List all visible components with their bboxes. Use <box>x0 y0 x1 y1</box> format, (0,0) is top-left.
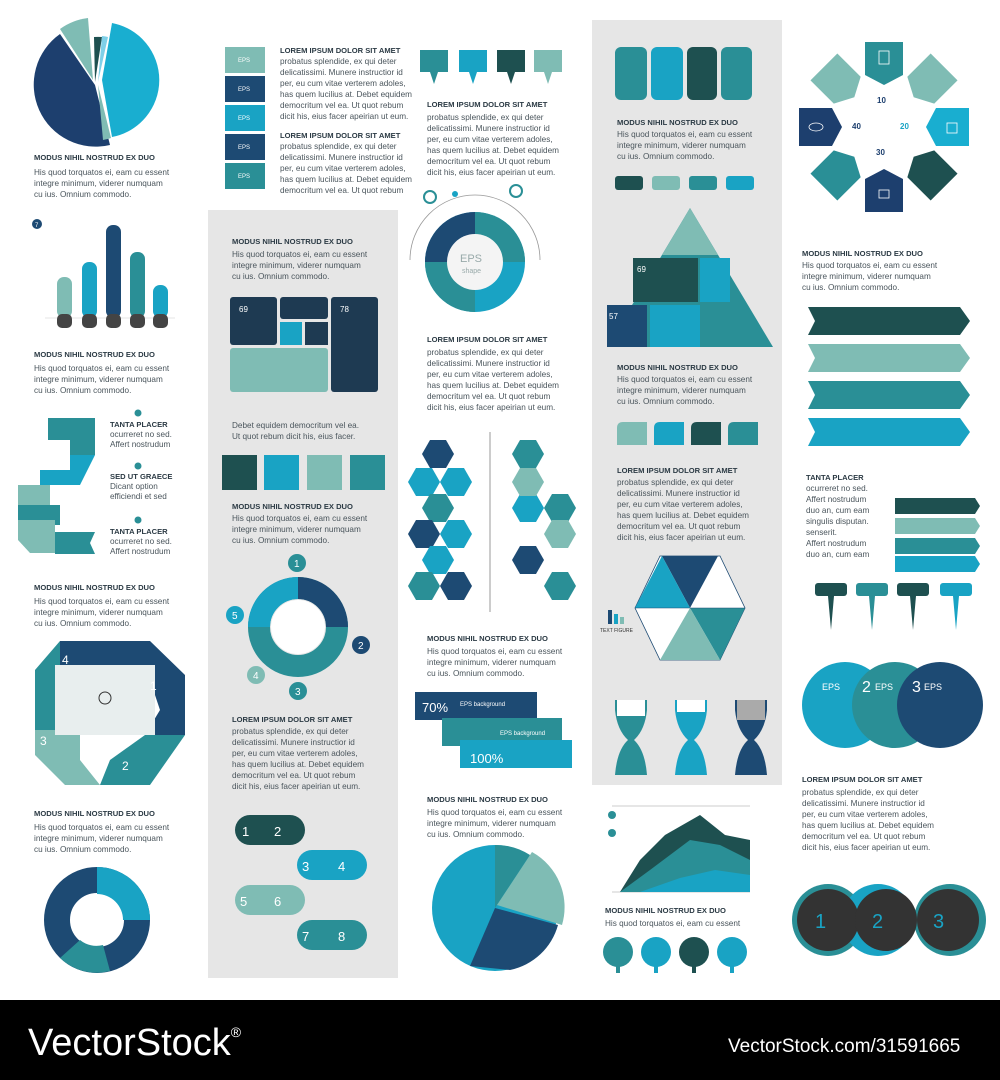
text: col5 lorem: delicatissimi. Munere instructior id <box>802 799 925 808</box>
text: col3 modus 2: integre minimum, viderer numquam <box>427 819 556 828</box>
speech bubbles <box>420 50 562 84</box>
text: col3 lorem 1: LOREM IPSUM DOLOR SIT AMET <box>427 100 548 109</box>
stacked tabs <box>225 47 265 189</box>
ribbon snake: SED UT GRAECE <box>110 472 172 481</box>
banners: 100% <box>470 751 504 766</box>
banners: EPS background <box>500 731 545 737</box>
panel: grey column 4 <box>592 20 782 785</box>
panel: grey column 2 <box>208 210 398 978</box>
stacked tabs: EPS <box>238 145 250 151</box>
hexagon timeline <box>408 432 576 612</box>
text: lorem tabs: has quem lucilius at. Debet equidem <box>280 175 412 184</box>
text: col3 modus 2 <box>427 795 563 839</box>
pyramid: 69 <box>637 265 646 274</box>
text: modus 3: cu ius. Omnium commodo. <box>34 619 131 628</box>
text: panel2 modus 2: integre minimum, viderer numquam <box>232 525 361 534</box>
text: col3 lorem 2: dicit his, eius facer apeirian ut eum. <box>427 403 555 412</box>
text: lorem tabs: has quem lucilius at. Debet equidem <box>280 90 412 99</box>
text: col3 lorem 2: LOREM IPSUM DOLOR SIT AMET <box>427 335 548 344</box>
icon ring col5 <box>799 42 969 212</box>
footer bar: VectorStock.com/31591665 <box>728 1036 960 1057</box>
text: panel2 modus 2 <box>232 502 368 545</box>
area chart <box>608 806 750 892</box>
text: col3 modus 2: cu ius. Omnium commodo. <box>427 830 524 839</box>
text: lorem tabs: dicit his, eius facer apeirian ut eum. <box>280 112 408 121</box>
box grid <box>230 297 378 392</box>
text: tanta placer col5: TANTA PLACER <box>806 473 864 482</box>
text: col3 lorem 1 <box>427 100 559 177</box>
text: modus 4: integre minimum, viderer numquam <box>34 834 163 843</box>
stacked tabs: EPS <box>238 58 250 64</box>
text: debet: Debet equidem democritum vel ea. <box>232 421 359 430</box>
paired pills: 1 <box>242 824 249 839</box>
venn circles: EPS <box>875 682 893 692</box>
text: col5 lorem: dicit his, eius facer apeirian ut eum. <box>802 843 930 852</box>
ring diagram <box>226 554 370 700</box>
three dark circles: 3 <box>933 911 944 933</box>
tabs row <box>617 422 758 445</box>
text: col4 lorem: has quem lucilius at. Debet equidem <box>617 511 749 520</box>
text: tanta placer col5: Affert nostrudum <box>806 539 867 548</box>
text: debet <box>232 421 359 441</box>
text: col3 lorem 2: per, eu cum vitae verterem adoles, <box>427 370 553 379</box>
text: tanta placer col5 <box>806 473 869 559</box>
text: col5 modus: cu ius. Omnium commodo. <box>802 283 899 292</box>
text: col5 modus: MODUS NIHIL NOSTRUD EX DUO <box>802 249 923 258</box>
icon ring col5: 40 <box>852 122 861 131</box>
text: col5 lorem: democritum vel ea. Ut quot rebum <box>802 832 926 841</box>
text: lorem tabs: LOREM IPSUM DOLOR SIT AMET <box>280 46 401 55</box>
arrow banners <box>808 307 970 446</box>
text: col4 modus: His quod torquatos ei, eam cu essent <box>617 130 753 139</box>
ring diagram: 2 <box>358 641 364 652</box>
stacked tabs: EPS <box>238 87 250 93</box>
text: lorem tabs: democritum vel ea. Ut quot rebum <box>280 186 403 195</box>
text: panel2 lorem: delicatissimi. Munere instructior id <box>232 738 355 747</box>
hexagon chart <box>600 556 745 660</box>
cloud trees <box>603 937 747 973</box>
text: modus 3: MODUS NIHIL NOSTRUD EX DUO <box>34 583 155 592</box>
text: modus 4: cu ius. Omnium commodo. <box>34 845 131 854</box>
banners: EPS background <box>460 702 505 708</box>
text: panel2 modus: His quod torquatos ei, eam cu essent <box>232 250 368 259</box>
text: modus 2: integre minimum, viderer numquam <box>34 375 163 384</box>
text: col3 modus 2: His quod torquatos ei, eam cu essent <box>427 808 563 817</box>
footer bar: VectorStock <box>28 1022 231 1064</box>
paired pills: 7 <box>302 929 309 944</box>
text: debet: Ut quot rebum dicit his, eius facer. <box>232 432 355 441</box>
text: col3 modus: integre minimum, viderer numquam <box>427 658 556 667</box>
text: col4 modus 2: MODUS NIHIL NOSTRUD EX DUO <box>617 363 738 372</box>
text: lorem tabs: LOREM IPSUM DOLOR SIT AMET <box>280 131 401 140</box>
ribbon snake: ocurreret no sed. <box>110 430 172 439</box>
text: lorem tabs: per, eu cum vitae verterem adoles, <box>280 79 406 88</box>
text: col5 lorem <box>802 775 934 852</box>
text: panel2 lorem: probatus splendide, ex qui deter <box>232 727 349 736</box>
octagon cycle <box>35 641 185 785</box>
color squares <box>222 455 385 490</box>
text: col3 lorem 1: probatus splendide, ex qui deter <box>427 113 544 122</box>
small banner tabs <box>895 498 980 572</box>
text: col4 modus 2: integre minimum, viderer numquam <box>617 386 746 395</box>
text: lorem tabs: per, eu cum vitae verterem adoles, <box>280 164 406 173</box>
ring diagram: 5 <box>232 611 238 622</box>
footer bar: ® <box>231 1024 242 1040</box>
ribbon snake: Affert nostrudum <box>110 440 171 449</box>
three dark circles: 1 <box>815 911 826 933</box>
text: modus 3: His quod torquatos ei, eam cu essent <box>34 597 170 606</box>
text: tanta placer col5: ocurreret no sed. <box>806 484 868 493</box>
footer bar <box>0 1000 1000 1080</box>
text: lorem tabs: delicatissimi. Munere instructior id <box>280 68 403 77</box>
donut bottom-left <box>57 867 150 973</box>
bar chart <box>32 219 175 328</box>
text: modus 3: integre minimum, viderer numquam <box>34 608 163 617</box>
pyramid <box>607 208 773 347</box>
text: col4 lorem: delicatissimi. Munere instructior id <box>617 489 740 498</box>
text: col3 lorem 2: has quem lucilius at. Debet equidem <box>427 381 559 390</box>
text: col3 lorem 2: democritum vel ea. Ut quot rebum <box>427 392 550 401</box>
text: col3 modus: MODUS NIHIL NOSTRUD EX DUO <box>427 634 548 643</box>
three dark circles <box>792 884 986 956</box>
text: panel2 lorem: per, eu cum vitae verterem adoles, <box>232 749 358 758</box>
octagon cycle: 4 <box>62 653 69 667</box>
text: col4 lorem: LOREM IPSUM DOLOR SIT AMET <box>617 466 738 475</box>
icon ring col5: 30 <box>876 148 885 157</box>
ribbon snake: Affert nostrudum <box>110 547 171 556</box>
text: col4 bottom modus <box>605 906 741 928</box>
circle segments diagram: EPS <box>460 253 482 265</box>
hourglasses <box>615 700 767 775</box>
text: panel2 lorem: dicit his, eius facer apeirian ut eum. <box>232 782 360 791</box>
text: col4 lorem: per, eu cum vitae verterem adoles, <box>617 500 743 509</box>
text: panel2 modus 2: His quod torquatos ei, eam cu essent <box>232 514 368 523</box>
paired pills: 6 <box>274 894 281 909</box>
text: col4 modus <box>617 118 753 161</box>
text: col4 lorem: democritum vel ea. Ut quot rebum <box>617 522 740 531</box>
text: modus 2 <box>34 350 170 395</box>
stacked tabs: EPS <box>238 174 250 180</box>
text: col4 lorem: dicit his, eius facer apeirian ut eum. <box>617 533 745 542</box>
text: modus 4: MODUS NIHIL NOSTRUD EX DUO <box>34 809 155 818</box>
stacked tabs: EPS <box>238 116 250 122</box>
octagon cycle: 2 <box>122 759 129 773</box>
box grid: 78 <box>340 305 349 314</box>
text: panel2 modus: MODUS NIHIL NOSTRUD EX DUO <box>232 237 353 246</box>
text: modus 1 <box>34 153 170 199</box>
ribbon snake: Dicant option <box>110 482 158 491</box>
text: panel2 modus 2: MODUS NIHIL NOSTRUD EX DUO <box>232 502 353 511</box>
text: col3 lorem 2: delicatissimi. Munere instructior id <box>427 359 550 368</box>
text: modus 2: cu ius. Omnium commodo. <box>34 386 131 395</box>
ribbon snake <box>18 410 172 556</box>
text: modus 1: cu ius. Omnium commodo. <box>34 190 131 199</box>
text: col4 modus: MODUS NIHIL NOSTRUD EX DUO <box>617 118 738 127</box>
circle segments diagram: shape <box>462 268 481 275</box>
text: modus 2: His quod torquatos ei, eam cu essent <box>34 364 170 373</box>
text: panel2 modus <box>232 237 368 281</box>
text: modus 1: His quod torquatos ei, eam cu essent <box>34 168 170 177</box>
text: col3 lorem 1: dicit his, eius facer apeirian ut eum. <box>427 168 555 177</box>
text: modus 1: integre minimum, viderer numquam <box>34 179 163 188</box>
text: col3 lorem 1: delicatissimi. Munere instructior id <box>427 124 550 133</box>
venn circles: EPS <box>822 682 840 692</box>
text: col3 lorem 1: per, eu cum vitae verterem adoles, <box>427 135 553 144</box>
text: lorem tabs: probatus splendide, ex qui deter <box>280 57 397 66</box>
text: panel2 modus 2: cu ius. Omnium commodo. <box>232 536 329 545</box>
text: col4 modus 2 <box>617 363 753 406</box>
text: tanta placer col5: duo an, cum eam <box>806 506 869 515</box>
text: col5 modus: His quod torquatos ei, eam cu essent <box>802 261 938 270</box>
paired pills <box>235 815 367 950</box>
small tags <box>615 176 754 190</box>
box grid: 69 <box>239 305 248 314</box>
text: lorem tabs: democritum vel ea. Ut quot rebum <box>280 101 403 110</box>
venn circles: 2 <box>862 679 871 696</box>
venn circles: EPS <box>924 682 942 692</box>
ribbon snake: efficiendi et sed <box>110 492 167 501</box>
text: tanta placer col5: singulis disputan. <box>806 517 869 526</box>
text: col4 modus: integre minimum, viderer numquam <box>617 141 746 150</box>
text: col3 lorem 2 <box>427 335 559 412</box>
paired pills: 2 <box>274 824 281 839</box>
venn circles <box>802 662 983 748</box>
three dark circles: 2 <box>872 911 883 933</box>
text: col5 lorem: probatus splendide, ex qui deter <box>802 788 919 797</box>
text: col4 bottom modus: MODUS NIHIL NOSTRUD EX DUO <box>605 906 726 915</box>
text: col5 modus <box>802 249 938 292</box>
ribbon snake: TANTA PLACER <box>110 527 168 536</box>
text: tanta placer col5: Affert nostrudum <box>806 495 867 504</box>
text: col4 modus 2: His quod torquatos ei, eam cu essent <box>617 375 753 384</box>
text: modus 3 <box>34 583 170 628</box>
pie chart bottom col3 <box>432 845 565 971</box>
icon ring col5: 20 <box>900 122 909 131</box>
text: col3 modus 2: MODUS NIHIL NOSTRUD EX DUO <box>427 795 548 804</box>
ring diagram: 4 <box>253 671 259 682</box>
bar chart: 7 <box>35 223 39 229</box>
text: col3 lorem 1: has quem lucilius at. Debet equidem <box>427 146 559 155</box>
hexagon chart: TEXT FIGURE <box>600 628 634 634</box>
ribbon snake: ocurreret no sed. <box>110 537 172 546</box>
text: col5 modus: integre minimum, viderer numquam <box>802 272 931 281</box>
paired pills: 4 <box>338 859 345 874</box>
text: tanta placer col5: duo an, cum eam <box>806 550 869 559</box>
paired pills: 8 <box>338 929 345 944</box>
text: panel2 modus: cu ius. Omnium commodo. <box>232 272 329 281</box>
text: panel2 lorem: LOREM IPSUM DOLOR SIT AMET <box>232 715 353 724</box>
ring diagram: 3 <box>295 687 301 698</box>
venn circles: 3 <box>912 679 921 696</box>
rounded tabs col4 <box>615 47 752 100</box>
ribbon snake: TANTA PLACER <box>110 420 168 429</box>
text: col3 modus: His quod torquatos ei, eam cu essent <box>427 647 563 656</box>
text: modus 4 <box>34 809 170 854</box>
text: col4 bottom modus: His quod torquatos ei, eam cu essent <box>605 919 741 928</box>
text: col5 lorem: has quem lucilius at. Debet equidem <box>802 821 934 830</box>
text: col4 modus: cu ius. Omnium commodo. <box>617 152 714 161</box>
text: col3 lorem 2: probatus splendide, ex qui deter <box>427 348 544 357</box>
text: tanta placer col5: senserit. <box>806 528 837 537</box>
text: col4 modus 2: cu ius. Omnium commodo. <box>617 397 714 406</box>
text: modus 4: His quod torquatos ei, eam cu essent <box>34 823 170 832</box>
banners: 70% <box>422 700 448 715</box>
icon ring col5: 10 <box>877 96 886 105</box>
text: col5 lorem: LOREM IPSUM DOLOR SIT AMET <box>802 775 923 784</box>
text: col3 modus: cu ius. Omnium commodo. <box>427 669 524 678</box>
text: modus 1: MODUS NIHIL NOSTRUD EX DUO <box>34 153 155 162</box>
text: col3 modus <box>427 634 563 678</box>
text: panel2 lorem: has quem lucilius at. Debet equidem <box>232 760 364 769</box>
text: col5 lorem: per, eu cum vitae verterem adoles, <box>802 810 928 819</box>
text: lorem tabs: probatus splendide, ex qui deter <box>280 142 397 151</box>
text: col4 lorem <box>617 466 749 542</box>
text: panel2 modus: integre minimum, viderer numquam <box>232 261 361 270</box>
text: panel2 lorem <box>232 715 364 791</box>
octagon cycle: 3 <box>40 734 47 748</box>
pins <box>815 583 972 630</box>
text: col3 lorem 1: democritum vel ea. Ut quot rebum <box>427 157 550 166</box>
octagon cycle: 1 <box>150 679 157 693</box>
pyramid: 57 <box>609 312 618 321</box>
circle segments diagram <box>410 185 540 312</box>
text: lorem tabs <box>280 46 412 195</box>
text: col4 lorem: probatus splendide, ex qui deter <box>617 478 734 487</box>
ring diagram: 1 <box>294 559 300 570</box>
paired pills: 3 <box>302 859 309 874</box>
text: modus 2: MODUS NIHIL NOSTRUD EX DUO <box>34 350 155 359</box>
paired pills: 5 <box>240 894 247 909</box>
text: panel2 lorem: democritum vel ea. Ut quot rebum <box>232 771 355 780</box>
text: lorem tabs: delicatissimi. Munere instructior id <box>280 153 403 162</box>
banners <box>415 692 572 768</box>
pie chart top-left <box>34 18 159 147</box>
